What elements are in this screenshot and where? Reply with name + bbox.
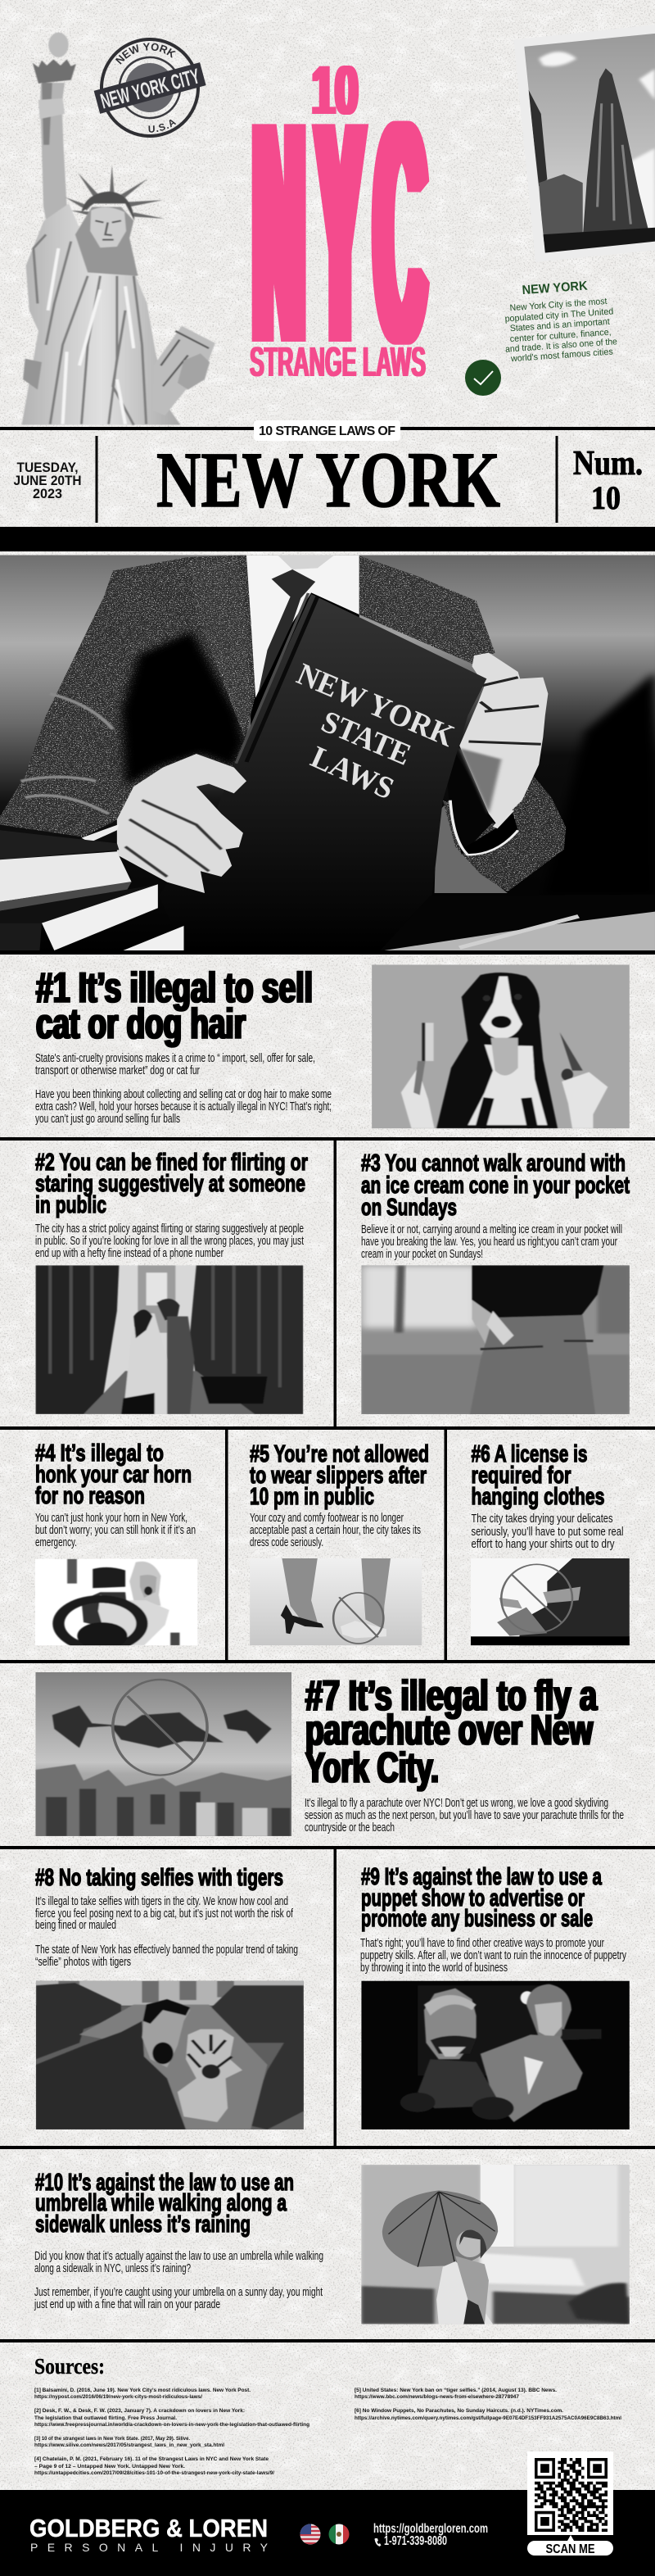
logo: Goldberg & Loren — [29, 2514, 269, 2554]
body text — [472, 1512, 624, 1551]
paragraph: States and is an important — [510, 317, 610, 333]
body text — [361, 1223, 622, 1261]
body text — [34, 2250, 323, 2311]
heading: on Sundays — [361, 1195, 457, 1221]
panel: law 1 cat or dog hair — [35, 964, 630, 1128]
book title text — [291, 657, 459, 806]
body text: Your cozy and comfy footwear is no longer — [250, 1512, 404, 1525]
heading: honk your car horn — [35, 1462, 192, 1488]
body text: cream in your pocket on Sundays! — [361, 1248, 483, 1261]
masthead rule and label: 10 STRANGE LAWS OF — [259, 424, 395, 438]
sources — [34, 2354, 621, 2476]
body text: in public. So if you’re looking for love in all the wrong places, you may just — [35, 1235, 304, 1248]
heading — [35, 1440, 192, 1509]
book title text: LAWS — [305, 740, 399, 806]
heading: cat or dog hair — [36, 1000, 246, 1048]
icon: US flag — [300, 2524, 321, 2545]
title NYC: NYC — [254, 57, 425, 410]
heading — [361, 1150, 630, 1221]
body text: by throwing it into the world of business — [360, 1961, 508, 1975]
paragraph: New York City is the most — [509, 297, 608, 313]
body text: countryside or the beach — [305, 1821, 395, 1834]
body text — [35, 1052, 332, 1126]
masthead issue number: Num. — [573, 445, 643, 483]
photo: selfie with a tiger — [36, 1981, 304, 2129]
paragraph — [502, 296, 618, 365]
photo: dog with comb and scissors — [372, 964, 630, 1128]
panel: law 2 flirting — [35, 1150, 308, 1414]
section rules and dividers — [0, 1137, 655, 2342]
panel: law 3 ice cream in pocket — [361, 1150, 630, 1414]
body text: The city takes drying your delicates — [472, 1512, 612, 1526]
body text: you can’t just go around selling fur balls — [35, 1113, 180, 1126]
stamp banner: NEW YORK CITY — [97, 63, 202, 114]
body text: acceptable past a certain hour, the city takes its — [250, 1524, 421, 1537]
sources right column: [5] United States: New York ban on “tiger selfies.” (2014, August 13). BBC News. — [355, 2388, 557, 2393]
sources right column — [355, 2388, 621, 2421]
body text: Have you been thinking about collecting and selling cat or dog hair to make some — [35, 1088, 332, 1101]
body text: The state of New York has effectively banned the popular trend of taking — [35, 1943, 298, 1957]
body text — [35, 1222, 304, 1260]
contact details — [373, 2522, 488, 2548]
body text: being fined or mauled — [35, 1919, 116, 1932]
icon: prohibition sign — [113, 1680, 207, 1776]
title: 10 NYC Strange Laws — [250, 52, 426, 410]
heading: in public — [35, 1192, 106, 1218]
heading: #2 You can be fined for flirting or — [35, 1150, 308, 1176]
heading — [305, 1672, 598, 1792]
panel: law 10 umbrella — [34, 2165, 630, 2324]
QR code — [527, 2451, 613, 2535]
body text: dress code seriously. — [250, 1536, 323, 1549]
masthead rule and label — [0, 420, 655, 441]
heading: for no reason — [35, 1483, 145, 1509]
sources left column: [2] Desk, F. W., & Desk, F. W. (2023, January 7). A crackdown on lovers in New York: — [34, 2408, 245, 2414]
stamp: New York City U.S.A — [93, 38, 206, 138]
sources left column — [34, 2388, 309, 2476]
body text — [360, 1937, 627, 1975]
masthead title: New York: NEW YORK — [156, 436, 500, 524]
scan me pill — [527, 2535, 613, 2556]
body text: The city has a strict policy against flirting or staring suggestively at people — [35, 1222, 304, 1236]
body text: You can’t just honk your horn in New York, — [35, 1512, 187, 1525]
icon: phone — [375, 2538, 382, 2547]
heading: York City. — [305, 1744, 439, 1792]
panel: law 5 slippers — [250, 1441, 429, 1645]
photo: couple in Dumbo street — [35, 1265, 303, 1414]
hero photo: lawyer holding New York State Laws book — [0, 556, 655, 955]
logo: Goldberg & Loren: GOLDBERG & LOREN — [29, 2514, 268, 2542]
body text: emergency. — [35, 1536, 77, 1549]
body text — [35, 1895, 298, 1969]
panel: law 8 tiger selfies — [35, 1865, 304, 2129]
sources left column: [3] 10 of the strangest laws in New York State. (2017, May 29). Silive. — [34, 2436, 190, 2442]
photo: puppeteer with puppet — [361, 1981, 630, 2129]
masthead issue number: 10 — [591, 479, 621, 516]
sources left column: https://www.freepressjournal.in/world/a-crackdown-on-lovers-in-new-york-the-legislation-that-outlawed-flirting — [34, 2422, 309, 2428]
heading: required for — [472, 1463, 571, 1489]
illustration: Statue of Liberty — [22, 33, 215, 425]
body text — [35, 1512, 196, 1549]
icon: check mark — [465, 360, 501, 396]
sources left column: [4] Chatelain, P. M. (2021, February 16). 11 of the Strangest Laws in NYC and New York State — [34, 2456, 269, 2462]
masthead date: JUNE 20TH — [13, 473, 82, 488]
icon: Mexico flag — [328, 2524, 350, 2545]
icon: prohibition sign — [501, 1564, 572, 1633]
black band — [0, 527, 655, 551]
masthead date — [13, 460, 82, 501]
masthead date: TUESDAY, — [16, 460, 79, 475]
sources left column: https://www.silive.com/news/2017/05/strangest_laws_in_new_york_sta.html — [34, 2442, 224, 2448]
body text: along a sidewalk in NYC, unless it’s raining? — [34, 2262, 191, 2275]
masthead dividers — [95, 436, 558, 523]
heading: hanging clothes — [472, 1484, 604, 1510]
heading: umbrella while walking along a — [35, 2190, 287, 2216]
sources left column: https://untappedcities.com/2017/09/28/cities-101-10-of-the-strangest-new-york-city-state-laws/9/ — [34, 2470, 274, 2476]
heading — [36, 964, 313, 1048]
body text: Did you know that it’s actually against the law to use an umbrella while walking — [34, 2250, 323, 2263]
paragraph: world's most famous cities — [510, 347, 614, 364]
body text: extra cash? Well, hold your horses because it is actually illegal in NYC! That’s right; — [35, 1100, 332, 1113]
photo: ice cream in jeans pocket — [361, 1265, 630, 1414]
panel: law 4 honking — [35, 1440, 197, 1649]
body text — [305, 1797, 624, 1834]
body text: but don’t worry; you can still honk it if it’s an — [35, 1524, 196, 1537]
body text: effort to hang your shirts out to dry — [472, 1538, 615, 1551]
icon: prohibition sign — [333, 1593, 383, 1644]
heading: to wear slippers after — [250, 1463, 427, 1489]
sources left column: [1] Balsamini, D. (2016, June 19). New York City’s most ridiculous laws. New York Post. — [34, 2388, 251, 2393]
footer bar — [0, 2451, 655, 2576]
heading — [35, 2170, 294, 2238]
sources left column: The legislation that outlawed flirting. Free Press Journal. — [34, 2415, 177, 2421]
contact details: 1-971-339-8080 — [384, 2534, 447, 2548]
body text: Just remember, if you’re caught using your umbrella on a sunny day, you might — [34, 2286, 323, 2299]
title Strange Laws: STRANGE LAWS — [250, 338, 426, 385]
sources left column: https://nypost.com/2016/06/19/new-york-citys-most-ridiculous-laws/ — [34, 2394, 202, 2400]
photo: high heels and forbidden slippers — [250, 1558, 422, 1645]
sources right column: [6] No Window Puppets, No Parachutes, No Sunday Haircuts. (n.d.). NYTimes.com. — [355, 2408, 563, 2414]
heading: NEW YORK — [522, 279, 589, 297]
sources left column: – Page 9 of 12 – Untapped New York. Untapped New York. — [34, 2464, 185, 2469]
body text: “selfie” photos with tigers — [35, 1956, 131, 1969]
panel: law 7 parachute — [35, 1672, 624, 1836]
text block: New York description — [501, 277, 618, 365]
masthead issue number — [573, 445, 643, 516]
body text: It’s illegal to take selfies with tigers in the city. We know how cool and — [35, 1895, 288, 1908]
heading: #5 You’re not allowed — [250, 1441, 429, 1467]
heading: 10 pm in public — [250, 1484, 374, 1510]
scan me pill: SCAN ME — [545, 2542, 595, 2556]
heading: sidewalk unless it’s raining — [35, 2211, 251, 2238]
heading: #10 It’s against the law to use an — [35, 2170, 294, 2196]
body text: State's anti-cruelty provisions makes it a crime to “ import, sell, offer for sale, — [35, 1052, 315, 1065]
photo: skydivers over the New York skyline — [35, 1672, 291, 1836]
title number: 10 — [312, 52, 358, 129]
paragraph: center for culture, finance, — [509, 328, 612, 344]
heading — [361, 1864, 603, 1932]
masthead date: 2023 — [33, 486, 62, 501]
paragraph: and trade. It is also one of the — [505, 337, 617, 355]
stamp banner — [94, 62, 206, 115]
body text: transport or otherwise market” dog or cat fur — [35, 1064, 200, 1077]
heading — [35, 1150, 308, 1218]
book title text: NEW YORK — [291, 657, 459, 754]
contact details: https://goldbergloren.com — [373, 2522, 488, 2536]
body text: end up with a hefty fine instead of a phone number — [35, 1247, 224, 1260]
heading — [472, 1441, 604, 1510]
panel: law 9 puppet show — [360, 1864, 630, 2129]
heading: #1 It’s illegal to sell — [36, 964, 313, 1012]
stamp text: New York: NEW YORK — [115, 43, 176, 65]
book title text: STATE — [316, 705, 416, 773]
photo: Flatiron building in white frame — [514, 25, 655, 262]
photo: angry driver honking — [35, 1559, 197, 1649]
photo: laundry on New York fire escapes — [471, 1558, 630, 1645]
body text: fierce you feel posing next to a big cat, but it’s just not worth the risk of — [35, 1907, 294, 1921]
heading: #8 No taking selfies with tigers — [35, 1865, 283, 1891]
heading: staring suggestively at someone — [35, 1171, 305, 1197]
panel: law 6 hanging clothes — [471, 1441, 630, 1645]
stamp text: U.S.A: U.S.A — [148, 120, 177, 133]
paragraph: populated city in The United — [504, 306, 614, 324]
sources right column: https://archive.nytimes.com/query.nytimes.com/gst/fullpage-9E07E4DF153FF931A2575AC0A96E9C8B63.html — [355, 2415, 621, 2421]
heading — [250, 1441, 429, 1510]
body text — [250, 1512, 421, 1549]
heading: #4 It’s illegal to — [35, 1440, 164, 1467]
logo: Goldberg & Loren: PERSONAL INJURY — [30, 2541, 269, 2554]
photo: woman with umbrella — [361, 2165, 630, 2324]
body text: just end up with a fine that will rain on your parade — [34, 2298, 220, 2311]
sources heading: Sources: — [34, 2354, 105, 2379]
sources right column: https://www.bbc.com/news/blogs-news-from-elsewhere-28778947 — [355, 2394, 519, 2400]
heading: #6 A license is — [472, 1441, 588, 1467]
